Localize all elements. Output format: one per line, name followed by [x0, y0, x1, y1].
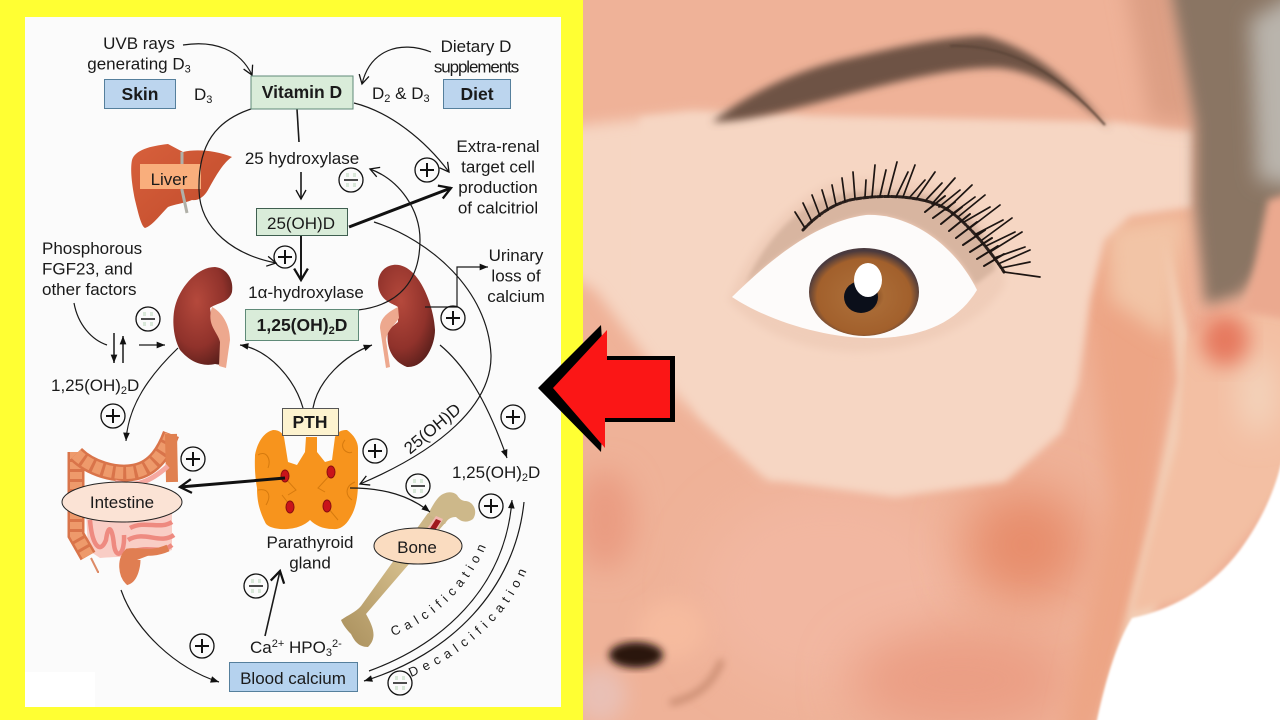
nose side redness	[575, 470, 635, 570]
box: blood calcium	[230, 662, 358, 692]
eye highlight	[854, 263, 882, 297]
box: diet	[444, 80, 510, 108]
label: calcium and phosphate: Ca	[250, 638, 272, 657]
label: calcification: Calcification	[391, 545, 486, 635]
pupil	[844, 281, 878, 313]
connector arrows	[74, 44, 524, 682]
label: urinary loss: Urinary	[489, 246, 543, 265]
small bowel loops	[90, 520, 174, 554]
nose lower pale	[574, 667, 626, 720]
box: diet: Diet	[460, 84, 494, 104]
eyelashes	[795, 162, 1040, 277]
label: 1,25(OH)2D right: 1,25(OH)	[452, 463, 522, 482]
minus	[388, 671, 412, 695]
icon: liver	[131, 144, 232, 228]
label: dietary D supplements: Dietary D	[441, 37, 511, 56]
label: D2 and D3: 3	[423, 93, 430, 105]
white corner patch	[25, 672, 95, 707]
pale tan line band left soft	[583, 108, 767, 479]
label: 1 alpha hydroxylase: 1α-hydroxylase	[248, 283, 364, 302]
icon: bone	[341, 492, 475, 647]
eyebrow upper edge	[950, 46, 1105, 125]
small bowel backing	[85, 490, 172, 558]
box: 25(OH)D	[256, 208, 348, 236]
label: dietary D supplements: supplements	[434, 58, 519, 76]
kidney to urinary	[425, 267, 488, 307]
side of face below band	[1066, 250, 1174, 720]
parathyroid to bone	[350, 488, 430, 512]
skin right of hair	[1245, 190, 1280, 320]
1,25 feedback to hydroxylase	[358, 169, 420, 310]
pale tan line band	[640, 113, 1193, 497]
minus	[244, 574, 268, 598]
plus	[181, 447, 205, 471]
hair shadow at hairline	[1120, 0, 1195, 125]
label: liver: Liver	[151, 170, 188, 189]
label: intestine	[62, 482, 182, 522]
vitamin D to liver to 1 alpha	[199, 108, 276, 263]
label: phosphorous: other factors	[42, 280, 136, 299]
label: 1,25(OH)2D right: D	[528, 463, 540, 482]
box: skin: Skin	[122, 84, 158, 104]
25OHD to 1 alpha	[300, 236, 302, 280]
label: UVB rays: 3	[185, 64, 191, 76]
eyebrow	[712, 36, 1110, 130]
vitamin D to extra-renal	[354, 103, 449, 172]
label: urinary loss: calcium	[487, 287, 545, 306]
box: 25(OH)D: 25(OH)D	[267, 214, 335, 233]
pink loop upper	[115, 466, 168, 484]
box: PTH	[282, 408, 338, 436]
box: vitamin D: Vitamin D	[262, 82, 342, 102]
PTH to left kidney	[240, 345, 303, 408]
calcium to parathyroid	[265, 571, 280, 636]
UVB arrow	[183, 44, 252, 75]
icon: right kidney	[378, 265, 435, 368]
plus	[190, 634, 214, 658]
label: phosphorous: Phosphorous	[42, 239, 142, 258]
plus and minus symbols	[101, 158, 525, 695]
intestine to blood calcium	[121, 590, 219, 682]
left kidney to intestine	[126, 348, 178, 441]
white backdrop	[1095, 460, 1280, 720]
label: D2 and D3: 2	[384, 93, 390, 105]
sclera	[732, 215, 977, 338]
label: 1,25(OH)2D left: 2	[121, 385, 127, 397]
box: 1,25(OH)2D: 2	[329, 325, 335, 337]
ascending colon	[171, 434, 172, 482]
box: blood calcium: Blood calcium	[240, 669, 346, 688]
pale strip before ear	[1111, 268, 1190, 662]
ear redness	[1201, 314, 1249, 366]
box: vitamin D	[251, 76, 353, 109]
transverse colon bumps	[76, 434, 171, 473]
lid beige band	[745, 190, 995, 285]
label: calcium and phosphate: 3	[326, 647, 332, 659]
nose crease	[670, 660, 722, 703]
1,25 arc to blood calcium	[364, 502, 524, 681]
label: 25 hydroxylase: 25 hydroxylase	[245, 149, 359, 168]
label: D2 and D3: & D	[390, 84, 423, 103]
minus	[136, 307, 160, 331]
label: extra-renal: target cell	[461, 158, 535, 176]
label: extra-renal: of calcitriol	[458, 198, 538, 218]
box: PTH: PTH	[292, 412, 328, 432]
25OHD long arc to parathyroid	[360, 222, 491, 484]
dietary arrow	[362, 47, 431, 84]
panel: source boxes	[104, 76, 510, 109]
hydroxylase to 25OHD	[300, 172, 302, 199]
box: 1,25(OH)2D: D	[335, 315, 347, 335]
label: 1,25(OH)2D left: 1,25(OH)	[51, 376, 121, 395]
label: calcium and phosphate: 2+	[272, 638, 284, 650]
plus	[415, 158, 439, 182]
label: parathyroid gland: gland	[289, 554, 331, 572]
plus	[501, 405, 525, 429]
plus	[441, 306, 465, 330]
minus	[406, 474, 430, 498]
lower cheek centre	[736, 522, 926, 658]
parathyroid to intestine	[180, 478, 285, 487]
label: D3: D	[194, 85, 206, 104]
minus	[339, 168, 363, 192]
hair	[1165, 0, 1280, 305]
label: extra-renal: production	[458, 178, 538, 197]
yellow frame panel	[0, 0, 583, 720]
lower bowel	[123, 548, 168, 581]
plus	[101, 404, 125, 428]
label: parathyroid gland: Parathyroid	[267, 533, 353, 552]
label: calcium and phosphate: HPO	[284, 638, 326, 657]
label: 1,25(OH)2D left: D	[127, 376, 139, 395]
label: urinary loss: loss of	[491, 266, 541, 286]
label: extra-renal: Extra-renal	[456, 137, 540, 156]
icon: left kidney	[173, 267, 232, 368]
temple colour	[1105, 212, 1190, 340]
icon: parathyroid gland	[255, 430, 358, 529]
label: D2 and D3: D	[372, 84, 384, 103]
descending colon base	[76, 452, 88, 556]
PTH to right kidney	[313, 345, 372, 408]
box: 1,25(OH)2D: 1,25(OH)	[257, 315, 329, 335]
diagram background	[25, 17, 561, 707]
25OHD to extra renal	[349, 188, 451, 227]
ear	[1132, 310, 1280, 612]
arrow: big red arrow	[538, 325, 675, 452]
nostril	[609, 642, 663, 668]
label: bone: Bone	[397, 538, 437, 557]
box: 1,25(OH)2D	[246, 310, 358, 340]
label: decalcification: Decalcification	[408, 570, 526, 677]
vitamin D to hydroxylase	[297, 109, 299, 142]
label: intestine: Intestine	[90, 493, 154, 512]
transverse colon base	[76, 434, 171, 473]
nose highlight	[649, 614, 688, 646]
plus	[363, 439, 387, 463]
plus	[274, 246, 296, 268]
ear highlight	[1238, 355, 1278, 435]
lower cheek redness	[850, 630, 1070, 720]
label: UVB rays: generating D	[87, 54, 185, 74]
icon: intestine	[62, 434, 182, 581]
label: calcium and phosphate: 2-	[332, 638, 342, 650]
appendix	[91, 558, 99, 572]
plus	[479, 494, 503, 518]
iris	[809, 248, 919, 336]
down arrow	[113, 333, 115, 363]
lid fold	[728, 178, 1005, 352]
phosphorous curve	[74, 303, 107, 345]
blood calcium to 1,25 arc	[369, 500, 512, 671]
arrow to left kidney	[139, 344, 165, 346]
up arrow	[122, 336, 124, 363]
label: D3: 3	[206, 94, 212, 106]
right kidney to 1,25	[440, 345, 507, 458]
box: skin	[104, 80, 176, 108]
photo: face close-up with sunglasses tan line	[540, 0, 1280, 720]
label: phosphorous: FGF23, and	[42, 260, 133, 278]
cheek redness	[965, 490, 1085, 600]
grey hair	[1250, 0, 1280, 190]
label: UVB rays: UVB rays	[103, 34, 175, 53]
label: 1,25(OH)2D right: 2	[522, 472, 528, 484]
label: 25(OH)D diagonal: 25(OH)D	[400, 400, 465, 458]
descending colon bumps	[76, 452, 88, 556]
label: bone	[374, 528, 462, 564]
